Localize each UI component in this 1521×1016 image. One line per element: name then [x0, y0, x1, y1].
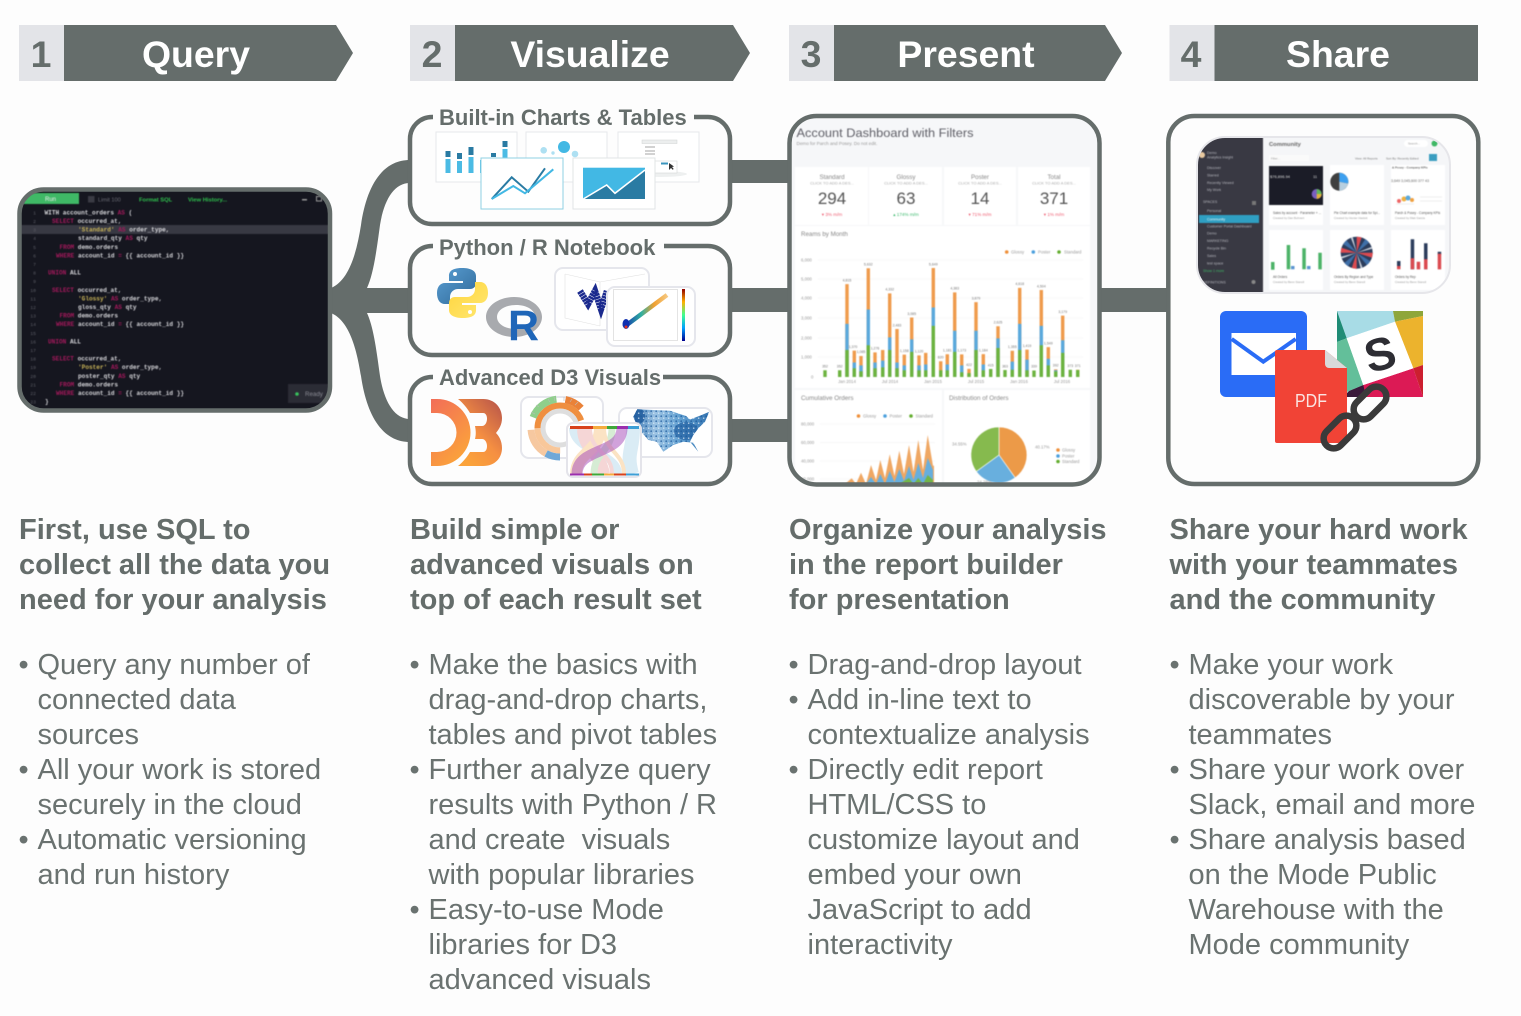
area chart: cumulative orders: 40,000	[801, 458, 815, 464]
bar chart: reams by month: 5,632	[864, 262, 873, 266]
bar chart: reams by month: 1,120	[915, 350, 923, 354]
step banner 4: Share: 4	[1181, 33, 1202, 75]
ready status badge	[288, 384, 330, 403]
community sidebar: My Work	[1207, 188, 1221, 192]
text block: column 3 bullets: contextualize analysis	[808, 719, 1090, 751]
bar chart: reams by month: 2,000	[801, 336, 812, 340]
SQL code lines: poster_qty AS qty	[78, 373, 141, 380]
bar chart: reams by month: 373	[1067, 364, 1073, 368]
bar chart: reams by month: 1,158	[900, 349, 909, 353]
text block: column 1 heading: need for your analysis	[19, 584, 327, 616]
thumbnail: pivot table	[618, 132, 699, 182]
step banner 1: Query: Query	[142, 33, 250, 75]
icon: R logo: R	[508, 302, 539, 350]
bar chart: reams by month: Poster	[1038, 250, 1051, 254]
community sidebar: Recently Viewed	[1207, 181, 1234, 185]
report card: pie chart example	[1330, 165, 1384, 225]
step banner 2: Visualize	[410, 25, 750, 81]
text block: column 1 bullets: securely in the cloud	[38, 789, 302, 821]
panel title: Advanced D3 Visuals	[439, 365, 661, 390]
SQL code lines: UNION ALL	[48, 338, 81, 345]
dashboard title: Account Dashboard with Filters	[796, 126, 974, 140]
text block: column 4 heading: Share your hard work	[1170, 514, 1469, 546]
report card: sales by account: 11	[1313, 174, 1318, 179]
text block: column 2 bullets: Further analyze query	[428, 754, 711, 786]
report card: orders by rep: Created by Benn Stancil	[1395, 280, 1427, 284]
ready status badge: Ready	[305, 391, 324, 398]
thumbnail: 3D scatter plot	[555, 268, 649, 330]
report card: sales by account: Created by Dan Bohnert	[1273, 216, 1304, 220]
text block: column 3 bullets: interactivity	[808, 929, 953, 961]
panel title: Python / R Notebook	[439, 235, 656, 260]
text block: column 2 bullets: and create visuals	[428, 824, 670, 856]
text block: column 3 bullets: customize layout and	[808, 824, 1080, 856]
SQL code lines: 2	[33, 219, 36, 225]
SQL code lines: 18	[30, 357, 36, 363]
SQL code lines: 13	[30, 314, 36, 320]
KPI card: Total: Total	[1047, 174, 1061, 181]
report card: sales by account: $76,896.94	[1270, 174, 1291, 179]
text block: column 4 bullets: Slack, email and more	[1188, 789, 1475, 821]
SQL code lines: 21	[30, 382, 36, 388]
report card: company KPIs	[1391, 165, 1445, 225]
step banner 4: Share: Share	[1286, 33, 1390, 75]
SQL code lines: WHERE account_id = {{ account_id }}	[56, 321, 184, 328]
text block: column 2 heading: advanced visuals on	[410, 549, 694, 581]
bar chart: reams by month: 1,085	[857, 350, 865, 354]
bar chart: reams by month: 1,419	[1023, 344, 1031, 348]
text block: column 3 bullets: Directly edit report	[808, 754, 1043, 786]
editor toolbar	[21, 193, 322, 204]
KPI card: Standard: CLICK TO ADD A DES...	[810, 180, 854, 186]
text block: column 4 heading: with your teammates	[1168, 549, 1458, 581]
step banner 3: Present: Present	[897, 33, 1035, 75]
bar chart: reams by month: Jul 2014	[882, 379, 899, 384]
area chart: cumulative orders	[795, 390, 942, 484]
panel: advanced D3 visuals	[410, 365, 730, 484]
connector: editor to visual panels brace	[331, 160, 410, 442]
SQL code lines: }	[45, 399, 49, 406]
editor toolbar: Limit 100	[98, 198, 121, 204]
text block: column 4 bullets: Share analysis based	[1188, 824, 1466, 856]
text block: column 4 bullets: discoverable by your	[1188, 684, 1455, 716]
KPI card: Glossy: Glossy	[897, 174, 916, 181]
community sidebar: Customer Portal Dashboard	[1207, 224, 1252, 228]
bar chart: reams by month: 3,085	[907, 312, 916, 316]
SQL code lines: 5	[33, 245, 36, 251]
text block: column 4 bullets: Share your work over	[1188, 754, 1464, 786]
text block: column 2 heading	[410, 514, 702, 616]
community sidebar: Show 1 more	[1203, 269, 1224, 273]
text block: column 2 bullets: libraries for D3	[428, 929, 617, 961]
pie chart: distribution of orders: 24.28%	[977, 480, 992, 484]
report card: company KPIs: Parch & Posey - Company KPIs	[1395, 211, 1441, 215]
text block: column 4 bullets: teammates	[1188, 719, 1332, 751]
SQL code lines: SELECT occurred_at,	[52, 287, 122, 294]
bar chart: reams by month: 4,000	[801, 296, 812, 300]
SQL code lines: FROM demo.orders	[60, 381, 118, 388]
bar chart: reams by month: 2,483	[893, 324, 901, 328]
thumbnail: US choropleth map	[619, 405, 715, 457]
SQL code lines: standard_qty AS qty	[78, 235, 148, 242]
SQL code lines: 1	[33, 210, 36, 216]
text block: column 3 bullets: •	[788, 649, 799, 681]
panel: report dashboard screenshot	[788, 114, 1101, 486]
KPI card: Glossy	[869, 167, 942, 225]
community sidebar: Discover	[1207, 166, 1222, 170]
panel: SQL editor screenshot	[20, 190, 330, 410]
text block: column 3 heading	[789, 514, 1107, 616]
bar chart: reams by month: 4,504	[1037, 284, 1046, 288]
text block: column 1 bullets: Query any number of	[38, 649, 311, 681]
SQL code lines: FROM demo.orders	[60, 313, 118, 320]
text block: column 1 bullets: •	[18, 824, 29, 856]
bar chart: reams by month: Standard	[1064, 250, 1082, 254]
report card: orders by region: Created by Benn Stancil	[1334, 280, 1366, 284]
text block: column 2 bullets: with popular libraries	[428, 859, 694, 891]
SQL code lines: 'Poster' AS order_type,	[78, 364, 162, 371]
SQL code lines: gloss_qty AS qty	[78, 304, 137, 311]
bar chart: reams by month: 820	[938, 356, 944, 360]
text block: column 2 bullets: •	[410, 754, 420, 786]
SQL code lines: 9	[33, 279, 36, 285]
SQL code lines: SELECT occurred_at,	[52, 356, 122, 363]
pie chart: distribution of orders: Glossy	[1062, 448, 1076, 452]
panel: built-in charts and tables	[410, 105, 730, 224]
step banner 1: Query: 1	[31, 33, 51, 75]
connector: visual panels to report	[728, 160, 792, 442]
KPI card: Poster	[944, 167, 1016, 225]
text block: column 4 heading: and the community	[1170, 584, 1435, 616]
community sidebar: Starred	[1207, 174, 1219, 178]
community sidebar: Sales	[1207, 254, 1216, 258]
area chart: cumulative orders: 80,000	[801, 422, 815, 426]
report card: orders by rep	[1391, 230, 1445, 290]
area chart: cumulative orders: 60,000	[801, 440, 815, 445]
text block: column 4 bullets: •	[1170, 649, 1180, 681]
community header: Community	[1269, 142, 1302, 148]
bar chart: reams by month: 4,332	[885, 288, 894, 292]
report card: sales by account: Sales by account · Parameter + ...	[1273, 211, 1321, 215]
community header: View: All Reports	[1355, 156, 1378, 160]
text block: column 3 heading: for presentation	[789, 584, 1010, 616]
text block: column 1 bullets: •	[18, 754, 29, 786]
text block: column 4 bullets: Mode community	[1188, 929, 1410, 961]
text block: column 2 bullets: drag-and-drop charts,	[428, 684, 707, 716]
bar chart: reams by month: 1,370	[849, 345, 857, 349]
text block: column 4 bullets: •	[1170, 754, 1180, 786]
icon: D3 logo	[431, 399, 502, 466]
SQL code lines: 23	[30, 400, 36, 406]
icon: python logo	[437, 268, 488, 318]
KPI card: Standard: ▾ 3% m/m	[822, 212, 842, 217]
community sidebar: Community	[1207, 218, 1225, 222]
SQL code lines: 15	[30, 331, 36, 337]
text block: column 3 bullets: •	[788, 754, 799, 786]
text block: column 4 bullets: Make your work	[1188, 649, 1394, 681]
editor toolbar: Format SQL	[139, 198, 173, 204]
report card: company KPIs: & Posey - Company KPIs	[1392, 166, 1428, 170]
bar chart: reams by month: Glossy	[1011, 250, 1025, 254]
pie chart: distribution of orders: 34.55%	[952, 442, 967, 446]
bar chart: reams by month: 1,549	[1044, 342, 1053, 346]
text block: column 1 bullets: and run history	[38, 859, 230, 891]
icon: slack	[1337, 311, 1423, 397]
text block: column 4 bullets: on the Mode Public	[1188, 859, 1437, 891]
report card: orders by rep: Orders by Rep	[1395, 275, 1416, 279]
SQL code lines: 10	[30, 288, 36, 294]
KPI card: Poster: 14	[971, 189, 989, 208]
panel: python and R notebook	[410, 235, 730, 355]
SQL code lines: WITH account_orders AS (	[44, 210, 132, 216]
report card: orders by region	[1330, 230, 1384, 290]
area chart: cumulative orders: Standard	[916, 414, 934, 418]
bar chart: reams by month: Jan 2014	[838, 379, 856, 384]
SQL code lines: 20	[30, 374, 36, 380]
text block: column 4 bullets	[1170, 649, 1475, 961]
text block: column 3 heading: in the report builder	[789, 549, 1063, 581]
editor toolbar: View History...	[188, 198, 227, 204]
KPI card: Standard	[795, 167, 868, 225]
SQL code lines: 14	[30, 322, 36, 328]
text block: column 4 bullets: Warehouse with the	[1188, 894, 1444, 926]
text block: column 2 bullets: advanced visuals	[428, 964, 651, 996]
pie chart: distribution of orders: 40.17%	[1035, 444, 1050, 450]
SQL code lines	[30, 210, 184, 406]
bar chart: reams by month: 392	[1053, 364, 1059, 368]
text block: column 4 heading	[1168, 514, 1469, 616]
step banner 2: Visualize: Visualize	[510, 33, 670, 75]
SQL code lines: 22	[30, 391, 36, 397]
dashboard title	[796, 126, 974, 146]
bar chart: reams by month: 3,179	[1058, 310, 1067, 314]
community sidebar: SPACES	[1203, 200, 1218, 204]
SQL code lines: 8	[33, 271, 36, 277]
text block: column 2 bullets	[410, 649, 717, 996]
community sidebar: Recycle Bin	[1207, 246, 1226, 250]
bar chart: reams by month: 1,355	[1008, 345, 1017, 349]
step banner 3: Present: 3	[801, 33, 821, 75]
step banner 1: Query	[19, 25, 353, 81]
text block: column 1 heading	[19, 514, 330, 616]
bar chart: reams by month: 5,649	[929, 262, 938, 266]
bar chart: reams by month: 1,000	[801, 354, 812, 360]
thumbnail: colored regression scatter	[607, 287, 695, 346]
community header: Search...	[1408, 142, 1420, 146]
text block: column 3 bullets	[788, 649, 1090, 961]
icon: email	[1220, 311, 1307, 397]
KPI card: Total: CLICK TO ADD A DES...	[1032, 180, 1076, 186]
SQL code lines: FROM demo.orders	[60, 244, 118, 251]
text block: column 3 bullets: Add in-line text to	[808, 684, 1032, 716]
text block: column 1 bullets: sources	[38, 719, 139, 751]
text block: column 2 heading: Build simple or	[410, 514, 619, 546]
community sidebar	[1197, 137, 1263, 293]
text block: column 2 bullets: •	[410, 649, 420, 681]
dashboard title: Demo for Parch and Posey. Do not edit.	[796, 141, 877, 146]
community sidebar: MARKETING	[1207, 239, 1229, 243]
SQL code lines: 17	[30, 348, 36, 354]
SQL code lines: 7	[33, 262, 36, 268]
bar chart: reams by month: Reams by Month	[801, 231, 848, 238]
KPI card: Poster: CLICK TO ADD A DES...	[958, 180, 1002, 186]
area chart: cumulative orders: Poster	[890, 414, 902, 418]
bar chart: reams by month: 415	[988, 364, 994, 368]
icon: chain link	[1319, 382, 1391, 453]
SQL code lines: 3	[33, 228, 36, 234]
step banner 2: Visualize: 2	[422, 33, 442, 75]
SQL code lines: 11	[30, 296, 36, 302]
KPI card: Total: ▾ 1% m/m	[1044, 212, 1064, 217]
community sidebar: test space	[1207, 262, 1223, 266]
bar chart: reams by month: 1,181	[943, 348, 952, 352]
screenshot: community page	[1197, 137, 1450, 293]
text block: column 1 bullets: Automatic versioning	[38, 824, 307, 856]
thumbnail: bar chart	[436, 132, 517, 182]
text block: column 1 bullets: •	[18, 649, 29, 681]
community sidebar: Personal	[1207, 209, 1221, 213]
KPI card: Glossy: CLICK TO ADD A DES...	[884, 180, 928, 186]
bar chart: reams by month: 2,625	[994, 320, 1002, 324]
SQL code lines: 4	[33, 236, 36, 242]
text block: column 2 bullets: •	[410, 894, 420, 926]
SQL code lines: 6	[33, 253, 36, 259]
bar chart: reams by month: 4,815	[843, 278, 851, 282]
bar chart: reams by month: Jul 2016	[1054, 379, 1071, 384]
KPI card: Poster: Poster	[971, 174, 989, 181]
bar chart: reams by month: 1,173	[957, 348, 966, 352]
KPI card: Glossy: ▴ 174% m/m	[893, 212, 919, 217]
step banner 4: Share	[1170, 25, 1478, 81]
text block: column 2 bullets: tables and pivot tables	[428, 719, 717, 751]
bar chart: reams by month: Jan 2016	[1010, 379, 1028, 384]
bar chart: reams by month: 1,276	[871, 346, 879, 350]
text block: column 1 heading: collect all the data you	[19, 549, 330, 581]
bar chart: reams by month: 422	[966, 363, 972, 367]
report card: sales by account	[1269, 165, 1323, 225]
SQL code lines: UNION ALL	[48, 270, 81, 277]
community header: Filter...	[1271, 156, 1280, 160]
report card: company KPIs: 3,649 3,045,600 377 43	[1391, 179, 1429, 183]
SQL code lines: WHERE account_id = {{ account_id }}	[56, 252, 184, 259]
text block: column 2 bullets: Make the basics with	[428, 649, 698, 681]
community header	[1269, 140, 1438, 161]
bar chart: reams by month: 6,000	[801, 258, 812, 262]
text block: column 1 bullets	[18, 649, 321, 891]
text block: column 3 heading: Organize your analysis	[789, 514, 1107, 546]
pie chart: distribution of orders: Standard	[1062, 459, 1080, 464]
pie chart: distribution of orders: Poster	[1062, 454, 1075, 458]
bar chart: reams by month: Jul 2015	[968, 379, 985, 384]
report card: all orders: All Orders	[1273, 275, 1288, 279]
bar chart: reams by month: 371	[1075, 364, 1081, 368]
bar chart: reams by month: 3,000	[801, 316, 812, 320]
report card: orders by region: Orders By Region and Type	[1334, 275, 1374, 279]
bar chart: reams by month: 3,879	[972, 296, 980, 300]
thumbnail: bubble chart	[526, 132, 607, 182]
SQL code lines: 19	[30, 365, 36, 371]
text block: column 3 bullets: HTML/CSS to	[808, 789, 986, 821]
area chart: cumulative orders: Cumulative Orders	[801, 395, 854, 402]
report card: all orders	[1269, 230, 1323, 290]
community sidebar: DEFINITIONS	[1203, 280, 1226, 284]
text block: column 3 bullets: JavaScript to add	[808, 894, 1032, 926]
report card: pie chart example: Pie Chart example data for Spi...	[1334, 211, 1380, 215]
report card: company KPIs: Created by Matt Garcia	[1395, 216, 1425, 220]
bar chart: reams by month	[795, 226, 1090, 388]
SQL code lines: WHERE account_id = {{ account_id }}	[56, 390, 184, 397]
KPI card: Standard: Standard	[819, 174, 845, 181]
panel title: Built-in Charts & Tables	[439, 105, 687, 130]
pie chart: distribution of orders: Distribution of Orders	[949, 395, 1008, 402]
SQL code lines: 12	[30, 305, 36, 311]
bar chart: reams by month: 1,184	[979, 348, 988, 352]
text block: column 1 bullets: All your work is stored	[38, 754, 321, 786]
KPI card: Standard: 294	[818, 189, 846, 208]
pie chart: distribution of orders	[944, 390, 1090, 484]
KPI card: Glossy: 63	[897, 189, 915, 208]
community sidebar: Demo	[1207, 232, 1217, 236]
community header: Sort By: Recently Edited	[1386, 156, 1419, 160]
KPI card: Poster: ▾ 71% m/m	[969, 212, 992, 217]
editor toolbar: Run	[45, 197, 56, 203]
connector: report to share	[1098, 288, 1170, 312]
step banner 3: Present	[789, 25, 1122, 81]
area chart: cumulative orders: Glossy	[863, 414, 877, 418]
text block: column 3 bullets: •	[788, 684, 799, 716]
text block: column 2 bullets: results with Python / R	[428, 789, 717, 821]
bar chart: reams by month: 339	[1031, 364, 1037, 368]
text block: column 2 heading: top of each result set	[410, 584, 702, 616]
text block: column 1 heading: First, use SQL to	[19, 514, 251, 546]
text block: column 3 bullets: Drag-and-drop layout	[808, 649, 1082, 681]
icon: PDF file	[1275, 350, 1347, 443]
bar chart: reams by month: 5,000	[801, 276, 812, 282]
SQL code lines: SELECT occurred_at,	[52, 218, 122, 225]
report card: pie chart example: Created by Hunter Haslett	[1334, 216, 1368, 220]
bar chart: reams by month: 352	[837, 364, 843, 368]
KPI card: Total	[1018, 167, 1090, 225]
icon: slack: S	[1359, 325, 1401, 383]
thumbnail: sankey diagram	[567, 423, 641, 477]
bar chart: reams by month: 0	[811, 374, 814, 380]
text block: column 2 bullets: Easy-to-use Mode	[428, 894, 664, 926]
icon: PDF file: PDF	[1295, 390, 1327, 411]
thumbnail: sunburst chart	[521, 397, 603, 458]
icon: R logo	[486, 297, 542, 350]
text block: column 1 bullets: connected data	[38, 684, 237, 716]
bar chart: reams by month: 363	[1002, 364, 1008, 368]
bar chart: reams by month: 4,383	[950, 286, 959, 290]
area chart: cumulative orders: 20,000	[801, 476, 815, 482]
report card: all orders: Created by Benn Stancil	[1273, 280, 1305, 284]
community sidebar: Demo	[1207, 151, 1217, 155]
KPI card: Total: 371	[1040, 189, 1068, 208]
text block: column 4 bullets: •	[1170, 824, 1180, 856]
thumbnail: area chart	[573, 158, 655, 209]
SQL code lines: 'Glossy' AS order_type,	[78, 295, 162, 302]
thumbnail: line chart	[481, 158, 563, 209]
SQL code lines: 16	[30, 339, 36, 345]
bar chart: reams by month: 4,618	[1015, 282, 1024, 286]
panel: share	[1168, 116, 1478, 484]
community sidebar: Analytics Insight	[1207, 156, 1233, 160]
text block: column 3 bullets: embed your own	[808, 859, 1022, 891]
bar chart: reams by month: 352	[822, 364, 828, 368]
SQL code lines: 'Standard' AS order_type,	[78, 227, 169, 234]
bar chart: reams by month: Jan 2015	[924, 379, 942, 384]
